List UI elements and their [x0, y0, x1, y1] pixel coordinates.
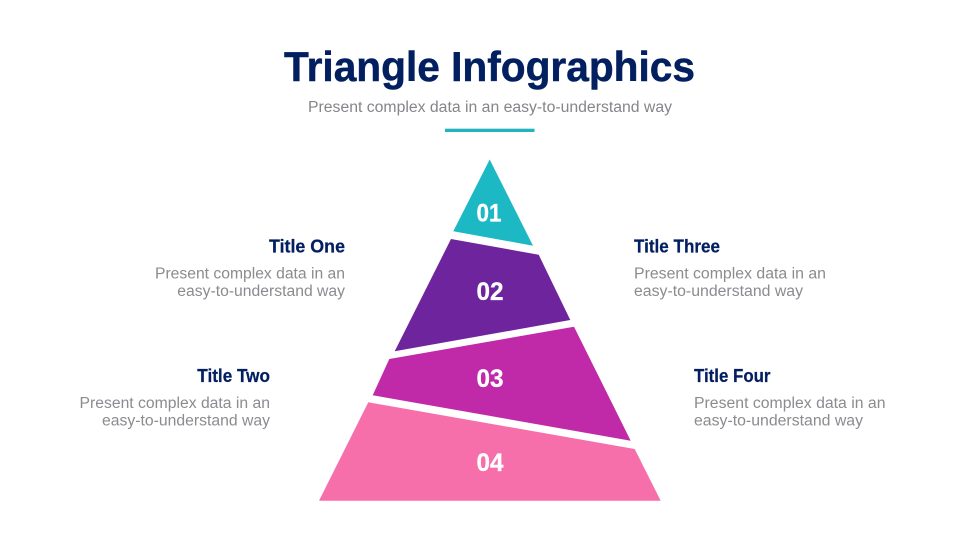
segment 04 — [319, 402, 661, 501]
text block: title one: Title One — [269, 236, 345, 256]
segment 01: 01 — [476, 200, 502, 228]
subtitle: Present complex data in an easy-to-understand way — [308, 99, 672, 116]
header — [284, 43, 695, 132]
pyramid chart — [319, 160, 661, 501]
text block: title three: Present complex data in an — [634, 266, 826, 282]
segment 04: 04 — [476, 449, 504, 477]
text block: title one — [155, 236, 345, 300]
text block: title three: Title Three — [634, 236, 720, 256]
title: Triangle Infographics — [284, 43, 695, 90]
segment 02: 02 — [476, 278, 504, 306]
text block: title four: Present complex data in an — [694, 395, 886, 412]
text block: title two: Present complex data in an — [80, 395, 270, 412]
text block: title two: Title Two — [197, 366, 270, 386]
segment 02 — [395, 239, 570, 351]
text block: title four: easy-to-understand way — [694, 412, 863, 430]
segment 01 — [453, 160, 533, 246]
text block: title two — [80, 366, 270, 430]
text block: title three: easy-to-understand way — [634, 283, 803, 300]
segment 03: 03 — [476, 365, 504, 393]
accent rule — [445, 129, 534, 132]
text block: title four — [694, 366, 886, 430]
text block: title three — [634, 236, 826, 300]
segment 03 — [373, 327, 631, 441]
text block: title four: Title Four — [694, 366, 770, 386]
text block: title one: Present complex data in an — [155, 266, 345, 282]
text block: title two: easy-to-understand way — [102, 412, 270, 430]
text block: title one: easy-to-understand way — [177, 283, 345, 300]
